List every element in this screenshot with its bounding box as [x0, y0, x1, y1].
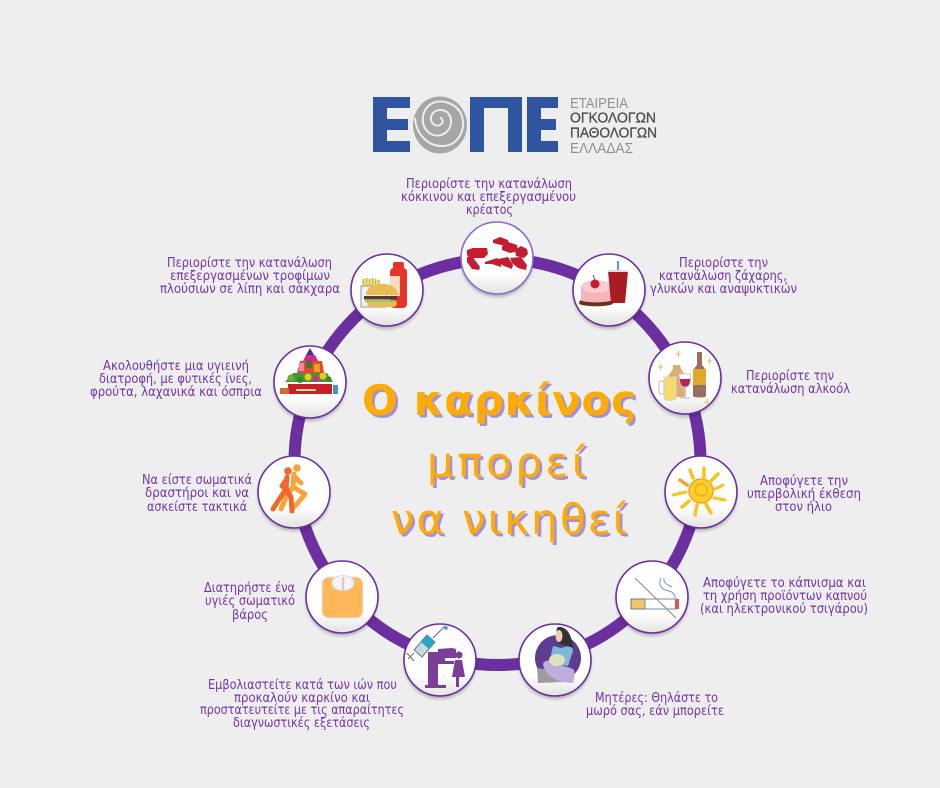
logo wordmark: ΕΤΑΙΡΕΙΑ — [570, 96, 628, 112]
label: smoking: τη χρήση προϊόντων καπνού — [703, 589, 867, 604]
node: smoking — [616, 561, 688, 636]
label: physical activity: ασκείστε τακτικά — [147, 500, 247, 515]
logo letter Π — [470, 97, 522, 152]
label: smoking: Αποφύγετε το κάπνισμα και — [703, 576, 866, 591]
label: smoking: (και ηλεκτρονικού τσιγάρου) — [700, 602, 868, 617]
label: breastfeeding: μωρό σας, εάν μπορείτε — [586, 704, 724, 719]
label: alcohol: κατανάλωση αλκοόλ — [731, 382, 850, 397]
label: sugar and soft drinks: γλυκών και αναψυκτικών — [650, 282, 797, 297]
label: sun: υπερβολική έκθεση — [747, 487, 861, 502]
label: sun: στον ήλιο — [775, 500, 832, 515]
logo wordmark: ΕΛΛΑΔΑΣ — [570, 141, 633, 157]
logo letter E — [527, 97, 558, 152]
label: red meat: Περιορίστε την κατανάλωση — [406, 177, 572, 192]
label: physical activity: Να είστε σωματικά — [142, 473, 252, 488]
logo wordmark: ΟΓΚΟΛΟΓΩΝ — [570, 110, 656, 126]
label: processed food: πλούσιων σε λίπη και σάκχαρα — [160, 282, 340, 297]
label: vaccination: προστατευτείτε με τις απαραίτητες — [200, 703, 404, 718]
logo wordmark: ΠΑΘΟΛΟΓΩΝ — [570, 126, 657, 142]
label: healthy diet: διατροφή, με φυτικές ίνες, — [99, 372, 252, 387]
icon: crossed cigarette — [631, 578, 679, 618]
label: healthy weight: Διατηρήστε ένα — [204, 581, 295, 596]
label: alcohol — [731, 369, 850, 397]
icon: food pyramid — [280, 348, 338, 394]
label: vaccination: προκαλούν καρκίνο και — [234, 691, 370, 706]
icon: sun — [673, 468, 725, 515]
logo wordmark — [570, 96, 657, 157]
node: processed food — [351, 254, 423, 329]
label: healthy weight: υγιές σωματικό — [205, 594, 295, 609]
label: vaccination — [200, 678, 404, 731]
node: alcohol — [649, 342, 721, 417]
label: red meat: κόκκινου και επεξεργασμένου — [401, 190, 576, 205]
label: physical activity — [142, 473, 252, 515]
label: sun — [747, 474, 861, 515]
title — [362, 376, 638, 546]
label: physical activity: δραστήροι και να — [145, 486, 249, 501]
node: red meat — [461, 222, 533, 297]
icon: two runners — [273, 464, 305, 511]
logo letter E — [373, 97, 410, 152]
node: breastfeeding — [519, 624, 591, 699]
icon: bottle and glasses — [658, 351, 712, 405]
label: processed food: Περιορίστε την κατανάλωση — [167, 256, 332, 271]
label: healthy diet: φρούτα, λαχανικά και όσπρια — [90, 385, 262, 400]
label: sugar and soft drinks — [650, 256, 797, 297]
label: red meat: κρέατος — [466, 203, 513, 218]
node: sun — [665, 456, 737, 531]
label: sugar and soft drinks: κατανάλωση ζάχαρης, — [659, 269, 787, 284]
node: healthy diet — [274, 346, 346, 421]
label: red meat — [401, 177, 576, 218]
label: breastfeeding — [586, 691, 724, 719]
ring — [294, 259, 700, 665]
node: healthy weight — [306, 561, 378, 636]
node: sugar and soft drinks — [573, 254, 645, 329]
label: sun: Αποφύγετε την — [760, 474, 848, 489]
title: Ο καρκίνος — [364, 378, 638, 428]
label: vaccination: Εμβολιαστείτε κατά των ιών που — [208, 678, 397, 693]
logo: ΕΟΠΕ — [373, 96, 657, 157]
icon: syringe and mammography machine — [407, 626, 465, 688]
label: healthy diet: Ακολουθήστε μια υγιεινή — [103, 359, 249, 374]
title: Ο καρκίνος — [362, 376, 636, 425]
icon: burger, fries, ketchup — [361, 262, 407, 308]
title: να νικηθεί — [391, 495, 627, 544]
label: alcohol: Περιορίστε την — [746, 369, 834, 384]
title: να νικηθεί — [394, 498, 630, 546]
node: vaccination and screening — [404, 624, 476, 699]
title: μπορεί — [430, 440, 588, 490]
logo spiral — [413, 96, 467, 154]
label: healthy weight: βάρος — [232, 608, 268, 623]
icon: cake and drink — [579, 261, 628, 306]
label: smoking — [700, 576, 868, 617]
label: healthy weight — [204, 581, 295, 623]
label: vaccination: διαγνωστικές εξετάσεις — [233, 716, 370, 731]
label: processed food — [160, 256, 340, 297]
label: processed food: επεξεργασμένων τροφίμων — [170, 269, 330, 284]
node: physical activity — [258, 456, 330, 531]
icon: meat cuts — [467, 237, 528, 270]
icon: mother and baby — [535, 627, 581, 683]
label: breastfeeding: Μητέρες: Θηλάστε το — [595, 691, 718, 706]
title: μπορεί — [427, 438, 586, 487]
label: sugar and soft drinks: Περιορίστε την — [679, 256, 768, 271]
icon: bathroom scale — [322, 576, 363, 618]
label: healthy diet — [90, 359, 262, 400]
